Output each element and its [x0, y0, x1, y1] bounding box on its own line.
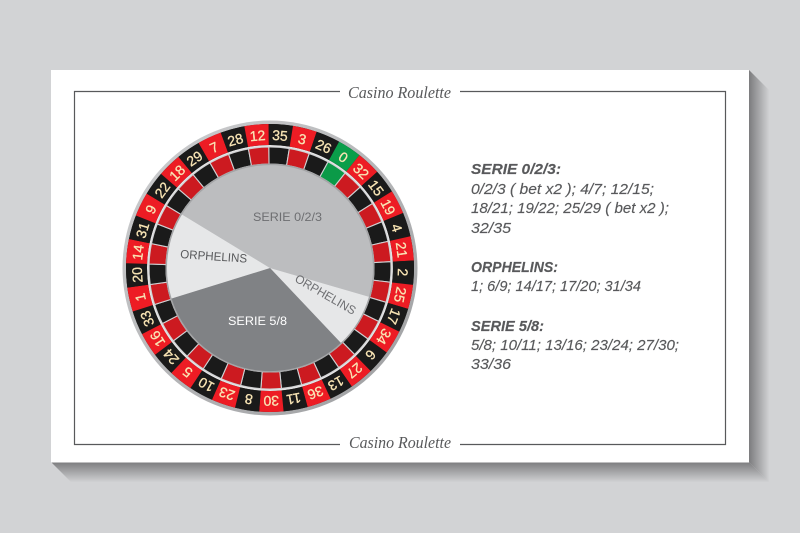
pocket segments: 4	[388, 222, 406, 234]
pocket segments: 16	[146, 328, 168, 350]
text block: serie 0/2/3: 32/35	[471, 220, 512, 237]
pocket segments: 24	[160, 346, 182, 368]
pocket segments: 31	[133, 220, 152, 240]
separator ring	[147, 145, 393, 391]
pocket segments: 35	[272, 127, 289, 144]
pocket segments: 26	[313, 136, 334, 157]
pocket segments: 0	[336, 148, 351, 166]
inner rim	[166, 164, 374, 372]
text block: serie 5/8	[471, 318, 679, 373]
sector: serie 5/8	[172, 268, 341, 371]
pocket segments: 7	[207, 138, 221, 156]
label: orphelins left: ORPHELINS	[180, 247, 248, 266]
pocket segments: 6	[362, 347, 379, 363]
pocket segments: 32	[350, 160, 372, 182]
text block: serie 0/2/3: SERIE 0/2/3:	[471, 161, 561, 178]
pocket segments: 14	[129, 243, 147, 261]
sector: serie 0/2/3	[182, 165, 373, 297]
pocket segments: 1	[132, 291, 149, 303]
pocket segments: 30	[263, 393, 279, 409]
pocket segments: 18	[166, 162, 188, 184]
pocket segments: 19	[377, 196, 399, 218]
pocket segments: 29	[184, 147, 206, 170]
pocket segments: 8	[243, 391, 254, 408]
wheel rim	[122, 120, 418, 416]
text block: serie 5/8: 33/36	[471, 356, 512, 373]
text block: serie 5/8: 5/8; 10/11; 13/16; 23/24; 27/30;	[471, 337, 679, 354]
pocket segments: 34	[373, 326, 395, 348]
text block: serie 0/2/3: 18/21; 19/22; 25/29 ( bet x2 );	[471, 200, 669, 217]
pocket segments: 33	[137, 308, 157, 329]
pocket segments: 25	[391, 286, 410, 304]
roulette wheel	[122, 120, 418, 416]
sector: orphelins right	[270, 268, 369, 343]
text block: orphelins: ORPHELINS:	[471, 259, 558, 276]
pocket segments: 27	[343, 360, 366, 382]
card	[51, 70, 749, 462]
title: top: Casino Roulette	[348, 83, 451, 102]
pocket segments: 2	[395, 268, 411, 277]
label: serie 5/8: SERIE 5/8	[228, 314, 287, 328]
card shadow	[51, 70, 769, 482]
pocket segments: 3	[297, 130, 308, 148]
pocket segments	[126, 123, 414, 412]
text block: orphelins	[471, 259, 641, 295]
pocket segments: 13	[325, 373, 347, 394]
pocket segments: 5	[179, 363, 195, 381]
pocket segments: 23	[217, 384, 237, 404]
frame	[74, 92, 726, 444]
sector: orphelins left	[167, 214, 270, 298]
pocket segments: 9	[142, 202, 160, 216]
pocket segments: 12	[249, 127, 266, 144]
pocket segments: 10	[195, 374, 217, 395]
text block: serie 0/2/3	[471, 161, 669, 237]
label: serie 0/2/3: SERIE 0/2/3	[253, 210, 322, 224]
pocket segments: 15	[365, 177, 387, 199]
text block: orphelins: 1; 6/9; 14/17; 17/20; 31/34	[471, 278, 641, 295]
pocket segments: 22	[151, 179, 174, 201]
pocket segments: 17	[384, 306, 404, 327]
label: orphelins right: ORPHELINS	[292, 271, 358, 318]
pocket segments: 11	[285, 390, 302, 408]
text block: serie 0/2/3: 0/2/3 ( bet x2 ); 4/7; 12/15;	[471, 181, 654, 198]
pocket segments: 36	[305, 383, 326, 403]
wheel base ring	[126, 124, 414, 412]
title: bottom: Casino Roulette	[349, 433, 451, 452]
pocket segments: 28	[226, 130, 245, 149]
pocket segments: 20	[129, 266, 146, 283]
pocket segments: 21	[393, 241, 411, 259]
text block: serie 5/8: SERIE 5/8:	[471, 318, 544, 335]
